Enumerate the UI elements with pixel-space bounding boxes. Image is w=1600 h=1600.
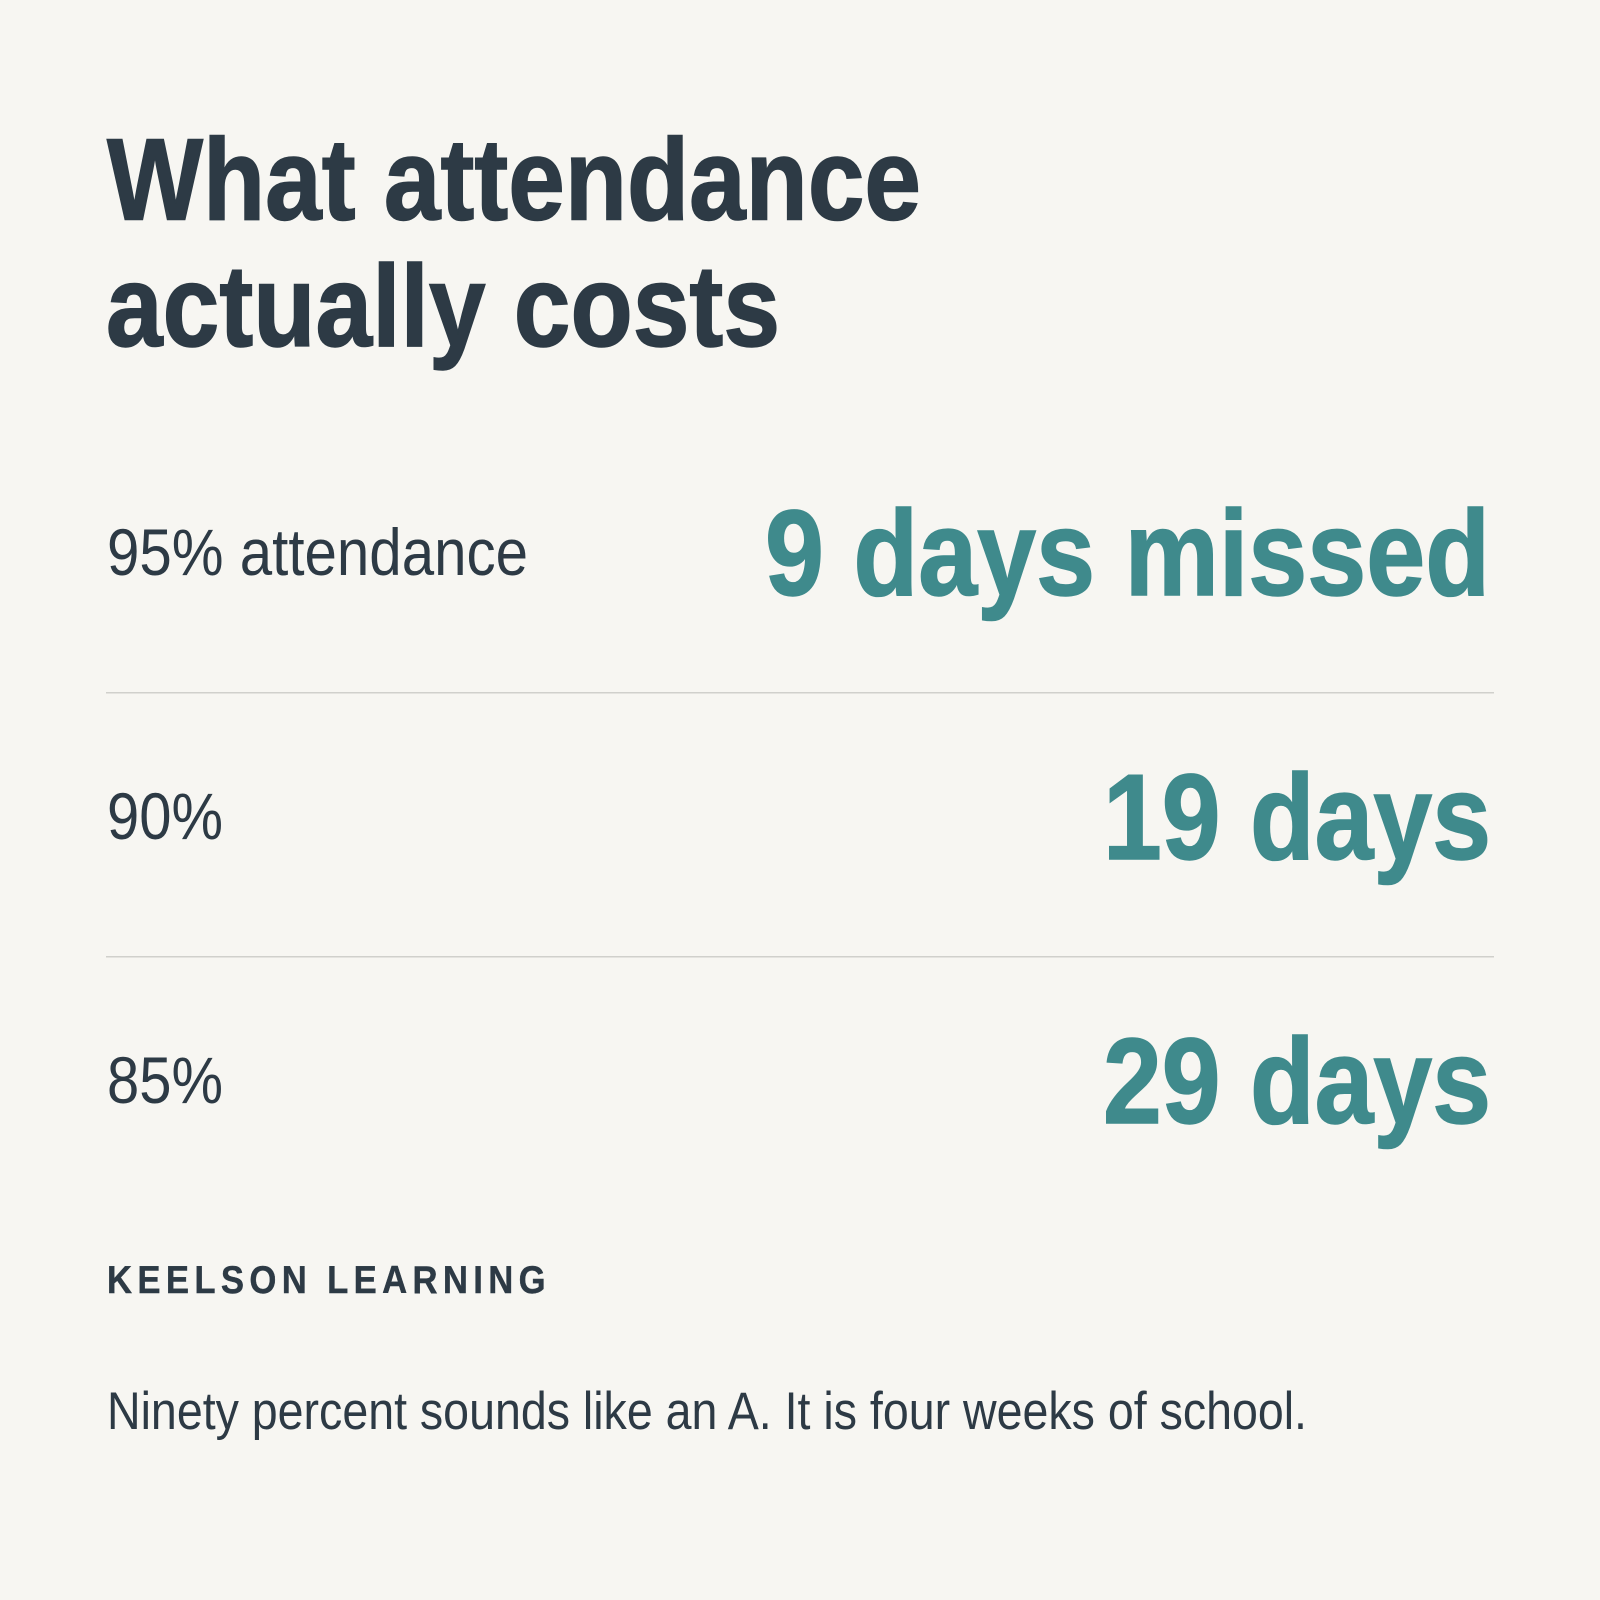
row: 85%: [107, 1013, 1491, 1149]
title: actually costs: [106, 241, 780, 371]
row: 85%: 29 days: [1103, 1013, 1491, 1149]
row: 95% attendance: 95% attendance: [107, 515, 528, 589]
brand name: KEELSON LEARNING: [107, 1259, 551, 1302]
closing statement: Ninety percent sounds like an A. It is four weeks of school.: [107, 1382, 1307, 1441]
row: 90%: 19 days: [1103, 749, 1491, 885]
title: [106, 114, 921, 371]
title: What attendance: [107, 114, 921, 244]
row: 90%: [107, 749, 1491, 885]
row: 95% attendance: 9 days missed: [765, 485, 1490, 621]
row: 85%: 85%: [107, 1043, 223, 1117]
row: 90%: 90%: [107, 779, 223, 853]
row: 95% attendance: [107, 485, 1490, 621]
